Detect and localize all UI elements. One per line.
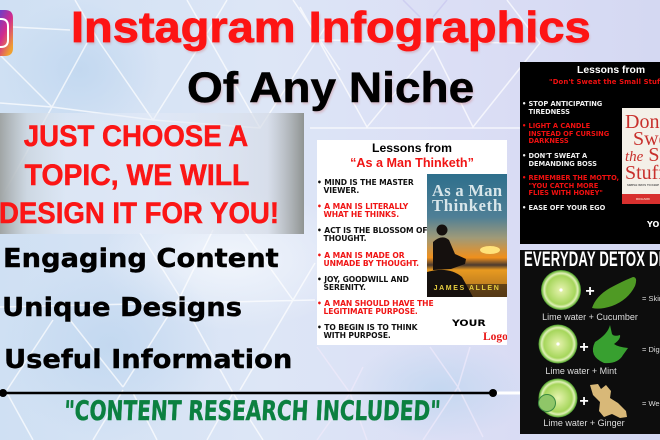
icons and labels: drink recipes: + [585,283,595,300]
card bullet list: • EASE OFF YOUR EGO [522,204,605,212]
row 3 [538,378,578,418]
card subheading: “As a Man Thinketh” [350,156,474,170]
card bullet list: • STOP ANTICIPATING [522,100,602,108]
panel: choose a topic banner [0,113,304,234]
panel: everyday detox drinks card [520,250,660,434]
card bullet list: • DON'T SWEAT A [522,152,587,160]
card bullet list: • A MAN IS LITERALLY [317,202,408,211]
feature: unique designs: Unique Designs [2,293,241,323]
icons and labels: drink recipes: Lime water + Mint [545,366,617,376]
card bullet list: DARKNESS [528,137,569,145]
card bullet list: • TO BEGIN IS TO THINK [317,323,417,332]
card bullet list: SERENITY. [324,283,366,292]
icons and labels: drink recipes [538,270,660,428]
card bullet list [522,100,619,212]
card heading: Lessons from [372,141,452,155]
card bullet list: VIEWER. [324,186,359,195]
callout: content research included: "CONTENT RESEARCH INCLUDED" [63,396,441,427]
divider with end dots [0,389,520,397]
icons and labels: drink recipes: + [579,339,589,356]
book cover: as a man thinketh [427,174,507,297]
card bullet list: • A MAN SHOULD HAVE THE [317,299,434,308]
book cover: as a man thinketh: As a Man [432,181,502,200]
your logo mark [452,319,507,343]
card bullet list: • LIGHT A CANDLE [522,122,590,130]
card bullet list: "YOU CATCH MORE [528,182,598,190]
row 2 [538,324,578,364]
card heading: Lessons from [577,65,645,76]
card bullet list: • ACT IS THE BLOSSOM OF [317,226,427,235]
book cover: as a man thinketh: JAMES ALLEN [434,285,500,292]
card bullet list: • JOY, GOODWILL AND [317,275,409,284]
book cover: don't sweat the small stuff [622,108,660,204]
row 1 [541,270,581,310]
book cover: don't sweat the small stuff: RICHARD [636,197,651,201]
book cover: as a man thinketh: Thinketh [432,196,502,215]
feature: useful information: Useful Information [4,345,292,375]
card bullet list: • REMEMBER THE MOTTO, [522,174,619,182]
card bullet list: TIREDNESS [528,108,570,116]
title: Instagram Infographics [71,3,591,52]
card bullet list: INSTEAD OF CURSING [528,130,609,138]
banner headline: TOPIC, WE WILL [25,158,249,192]
card bullet list: FLIES WITH HONEY" [528,189,603,197]
card bullet list: • A MAN IS MADE OR [317,251,404,260]
your logo mark: YOUR [452,319,486,329]
feature: engaging content: Engaging Content [3,244,279,274]
panel: don't sweat the small stuff card [520,62,660,244]
banner headline: JUST CHOOSE A [24,120,248,153]
icons and labels: drink recipes: + [579,393,589,410]
book cover: don't sweat the small stuff: SIMPLE WAYS TO KEEP [627,183,659,187]
icons and labels: drink recipes: Lime water + Ginger [543,418,625,428]
card bullet list: THOUGHT. [324,234,366,243]
icon: instagram logo [0,10,13,56]
banner headline: DESIGN IT FOR YOU! [0,197,279,230]
banner headline [0,120,279,230]
card bullet list: WITH PURPOSE. [324,331,391,340]
card bullet list: DEMANDING BOSS [528,160,597,168]
card bullet list: UNMADE BY THOUGHT. [324,259,419,268]
card bullet list: • MIND IS THE MASTER [317,178,414,187]
subtitle: Of Any Niche [187,64,474,112]
icons and labels: drink recipes: Lime water + Cucumber [542,312,638,322]
card bullet list: LEGITIMATE PURPOSE. [324,307,418,316]
panel: as a man thinketh card [317,140,507,345]
card bullet list: WHAT HE THINKS. [324,210,399,219]
card bullet list [317,178,434,340]
